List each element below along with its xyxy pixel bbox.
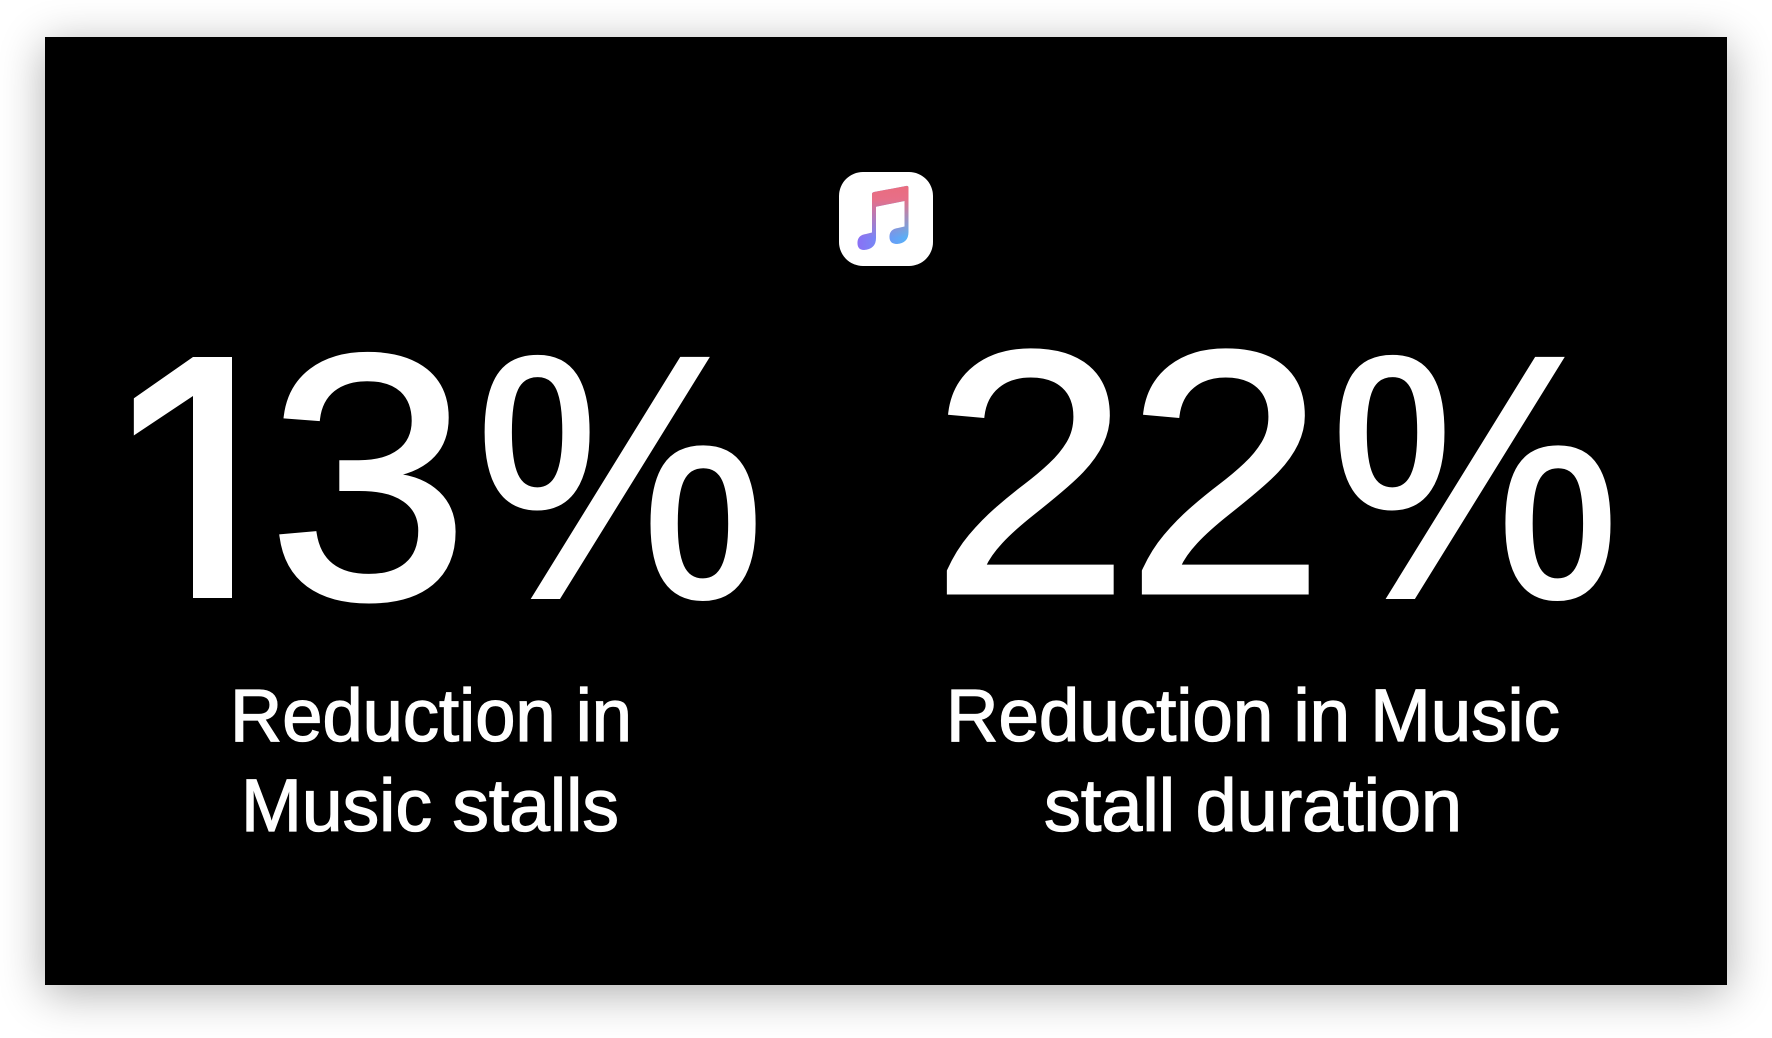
statistic: 22%: % xyxy=(1330,284,1620,671)
caption: Music stall duration: Reduction in Music xyxy=(946,674,1560,757)
statistic: 22%: 2 xyxy=(931,278,1130,666)
caption: Music stall duration: stall duration xyxy=(1044,764,1462,847)
caption: Music stalls xyxy=(230,674,632,847)
icon: music note glyph xyxy=(857,186,908,250)
caption: Music stalls: Music stalls xyxy=(241,764,619,847)
slide content xyxy=(134,172,1610,832)
statistic: 13%: 1 xyxy=(105,282,308,672)
statistic: 22%: 2 xyxy=(1126,278,1325,666)
caption: Music stall duration xyxy=(946,674,1560,847)
statistic: 13% xyxy=(134,352,756,604)
statistic: 13%: 3 xyxy=(268,283,469,673)
caption: Music stalls: Reduction in xyxy=(230,674,632,757)
icon: music app xyxy=(839,172,933,266)
statistic: 22% xyxy=(931,278,1620,671)
statistic: 13%: % xyxy=(475,284,765,671)
